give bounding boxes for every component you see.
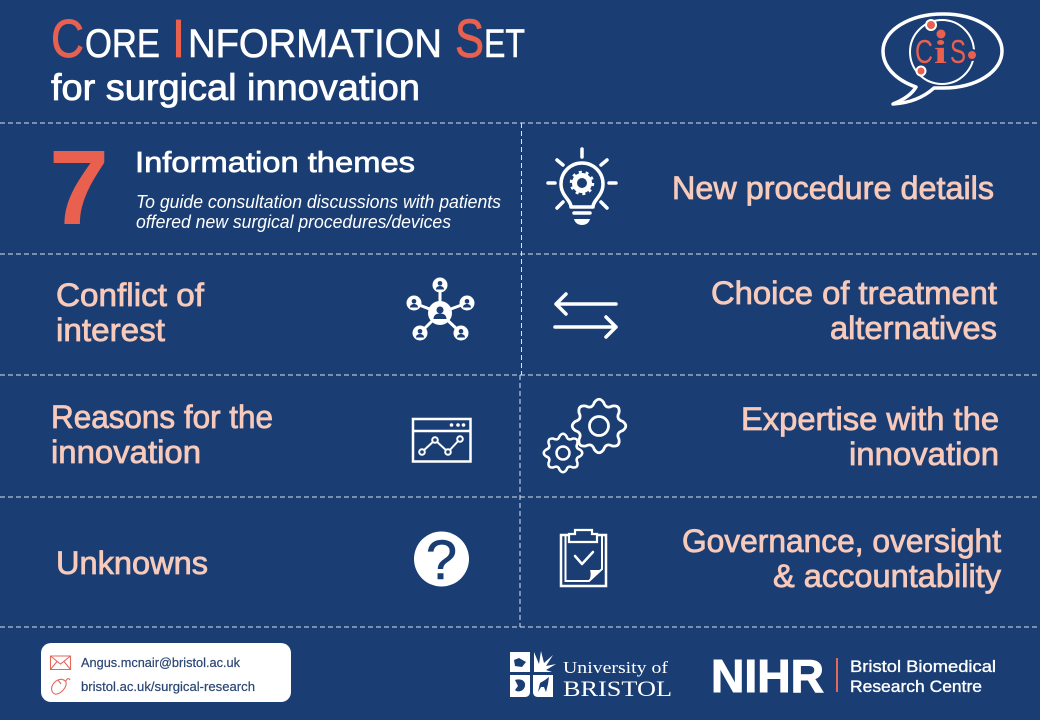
icon: browser window with line chart	[413, 419, 470, 462]
label: governance, oversight and accountability	[682, 523, 1001, 594]
text: themes description: To guide consultation discussions with patients	[136, 192, 501, 212]
title	[51, 9, 525, 108]
icon: CIS speech bubble logo	[883, 14, 1002, 104]
logo: NIHR Bristol Biomedical Research Centre: Bristol Biomedical	[850, 657, 996, 676]
text: email address: Angus.mcnair@bristol.ac.uk	[81, 655, 240, 670]
number seven: 7	[49, 129, 109, 247]
icon: computer mouse	[52, 679, 70, 694]
icon: exchange arrows	[555, 294, 616, 337]
label: reasons for the innovation: innovation	[51, 434, 201, 470]
label: reasons for the innovation	[51, 399, 273, 470]
title: for surgical innovation	[51, 67, 420, 108]
logo: NIHR Bristol Biomedical Research Centre	[711, 650, 996, 702]
icon: CIS speech bubble logo: C	[915, 33, 933, 70]
icon: light bulb with gear	[548, 149, 616, 225]
icon: question mark in circle: ?	[426, 528, 457, 591]
label: reasons for the innovation: Reasons for the	[51, 399, 273, 435]
label: choice of treatment alternatives: alternatives	[830, 310, 997, 346]
icon: envelope	[50, 656, 70, 670]
icon: CIS speech bubble logo: i	[934, 35, 947, 71]
title: C	[51, 9, 84, 69]
title: NFORMATION	[188, 22, 442, 66]
logo: NIHR Bristol Biomedical Research Centre: NIHR	[711, 650, 824, 702]
logo: NIHR Bristol Biomedical Research Centre: Research Centre	[850, 677, 982, 696]
label: conflict of interest: Conflict of	[56, 277, 204, 313]
text: themes description: offered new surgical procedures/devices	[136, 212, 451, 232]
heading: information themes: Information themes	[135, 147, 415, 179]
label: choice of treatment alternatives	[711, 275, 997, 346]
logo: University of Bristol: University of	[563, 658, 668, 677]
icon: question mark in circle	[414, 528, 469, 591]
logo: University of Bristol	[510, 651, 672, 701]
logo: University of Bristol: BRISTOL	[563, 676, 672, 701]
label: expertise with the innovation: innovation	[849, 436, 999, 472]
text: website address: bristol.ac.uk/surgical-research	[81, 679, 255, 694]
label: expertise with the innovation	[741, 401, 999, 472]
icon: two gears	[544, 399, 626, 472]
label: governance, oversight and accountability: Governance, oversight	[682, 523, 1001, 559]
label: new procedure details: New procedure details	[672, 170, 994, 206]
title: ET	[484, 22, 525, 66]
panel: contact details	[41, 643, 291, 702]
title: S	[455, 9, 484, 69]
label: expertise with the innovation: Expertise with the	[741, 401, 999, 437]
icon: clipboard with check	[561, 530, 606, 586]
title: I	[172, 9, 185, 69]
title: ORE	[85, 22, 160, 66]
icon: network of people	[406, 278, 474, 340]
text: themes description	[136, 192, 501, 232]
label: conflict of interest: interest	[56, 312, 165, 348]
label: governance, oversight and accountability: & accountability	[773, 558, 1001, 594]
label: conflict of interest	[56, 277, 204, 348]
icon: CIS speech bubble logo: S	[950, 33, 966, 70]
label: choice of treatment alternatives: Choice of treatment	[711, 275, 997, 311]
label: unknowns: Unknowns	[56, 545, 208, 581]
